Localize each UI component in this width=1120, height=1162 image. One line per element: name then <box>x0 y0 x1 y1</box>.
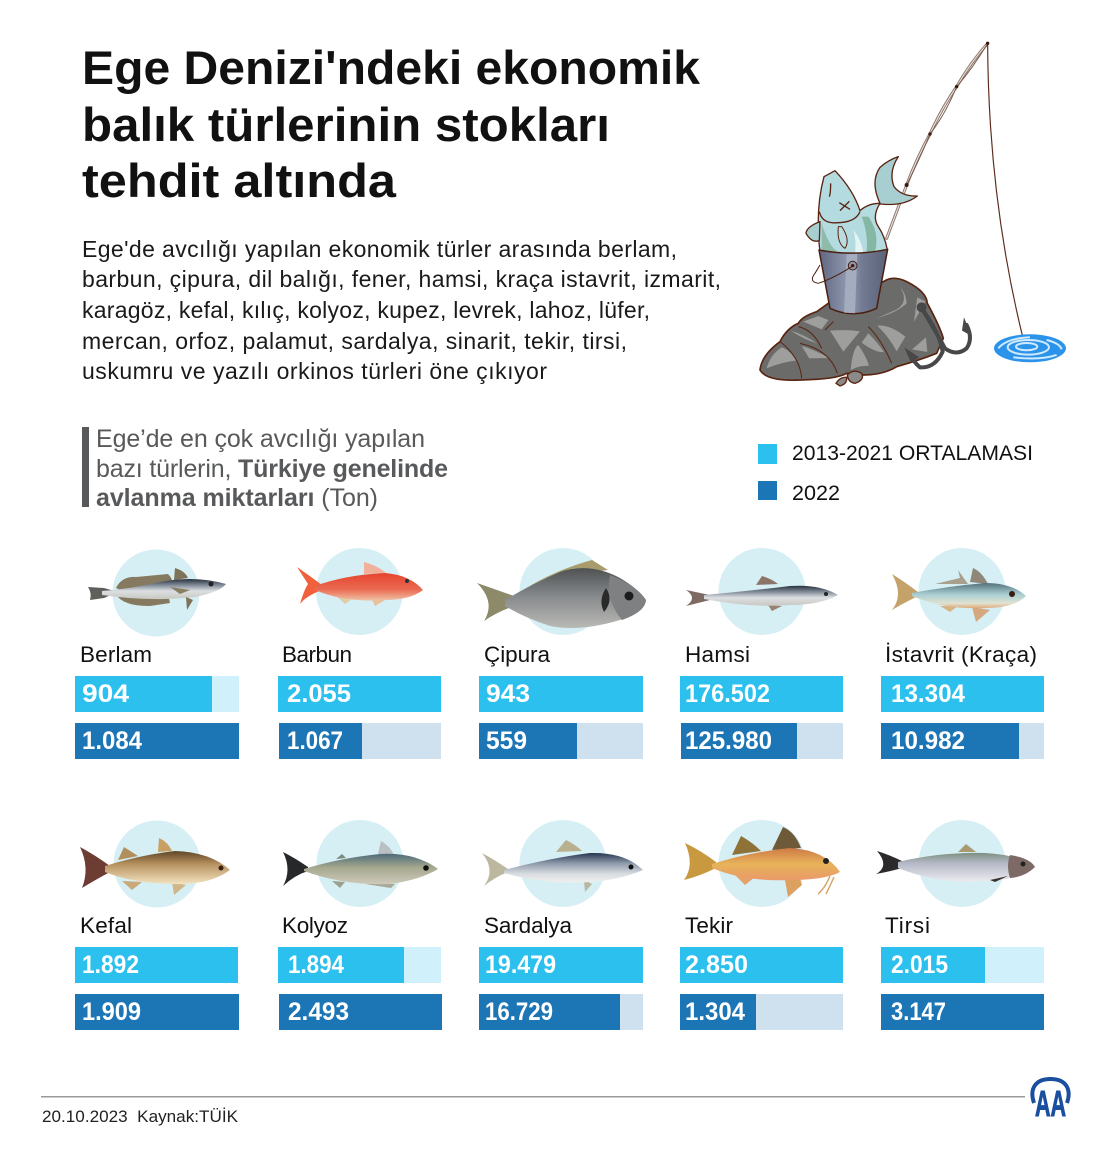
panel: Tirsi <box>876 820 1044 1030</box>
bar: 2022 <box>681 723 843 759</box>
icon: bucket <box>812 249 888 314</box>
bar: 2013-2021 average: 1.892 <box>82 951 139 979</box>
icon: water ripple <box>994 334 1066 362</box>
bar: 2013-2021 average: 2.055 <box>287 680 351 708</box>
bar: 2022: 1.304 <box>685 998 745 1026</box>
bar: 2022: 10.982 <box>891 727 965 755</box>
icon: rocks <box>760 278 943 386</box>
bar: 2013-2021 average <box>881 947 1044 983</box>
panel: Sardalya <box>479 820 643 1030</box>
bar: 2013-2021 average: 2.850 <box>685 951 748 979</box>
label: Barbun <box>282 642 352 667</box>
section subheading: avlanma miktarları (Ton) <box>96 484 378 512</box>
intro text block: uskumru ve yazılı orkinos türleri öne çıkıyor <box>82 358 547 384</box>
legend: 2022 <box>792 482 840 505</box>
bar: 2022: 3.147 <box>891 998 946 1026</box>
bar: 2022: 559 <box>486 727 527 755</box>
logo: AA <box>1032 1079 1069 1124</box>
panel: Berlam <box>75 550 239 759</box>
bar: 2013-2021 average <box>278 676 441 712</box>
footer: date and source: 20.10.2023 Kaynak:TÜİK <box>42 1107 238 1126</box>
section subheading <box>82 425 448 512</box>
icon: kolyoz fish <box>283 820 438 907</box>
label: Sardalya <box>484 913 572 938</box>
panel: Çipura <box>477 548 646 759</box>
section subheading: bazı türlerin, Türkiye genelinde <box>96 455 448 483</box>
panel: Hamsi <box>680 548 843 759</box>
intro text block: karagöz, kefal, kılıç, kolyoz, kupez, levrek, lahoz, lüfer, <box>82 297 650 323</box>
bar: 2022 <box>479 723 643 759</box>
icon: kefal fish <box>80 820 230 908</box>
icon: hamsi fish <box>686 548 838 635</box>
bar: 2022: 2.493 <box>288 998 349 1026</box>
title: tehdit altında <box>82 154 397 207</box>
intro text block <box>82 236 721 384</box>
icon: istavrit fish <box>892 548 1026 635</box>
bar: 2013-2021 average: 2.015 <box>891 951 948 979</box>
title <box>82 41 701 207</box>
icon: hook <box>904 302 972 367</box>
bar: 2022 <box>279 994 442 1030</box>
intro text block: mercan, orfoz, palamut, sardalya, sinarit, tekir, tirsi, <box>82 328 627 354</box>
bar: 2022: 16.729 <box>485 998 553 1026</box>
bar: 2013-2021 average <box>680 676 843 712</box>
bar: 2013-2021 average <box>881 676 1044 712</box>
intro text block: Ege'de avcılığı yapılan ekonomik türler arasında berlam, <box>82 236 677 262</box>
label: Berlam <box>80 642 152 667</box>
panel: Kolyoz <box>278 820 442 1030</box>
bar: 2013-2021 average <box>75 676 239 712</box>
bar: 2013-2021 average: 904 <box>82 680 129 708</box>
icon: tirsi fish <box>876 820 1035 907</box>
bar: 2013-2021 average <box>680 947 843 983</box>
bar: 2013-2021 average <box>278 947 441 983</box>
bar: 2013-2021 average: 13.304 <box>891 680 965 708</box>
bar: 2022: 1.067 <box>287 727 343 755</box>
title: Ege Denizi'ndeki ekonomik <box>82 41 701 94</box>
icon: barbun fish <box>297 548 423 635</box>
label: Tekir <box>685 913 734 938</box>
bar: 2013-2021 average <box>479 676 643 712</box>
bar: 2013-2021 average: 19.479 <box>485 951 556 979</box>
label: Kolyoz <box>282 913 348 938</box>
bar: 2022: 1.084 <box>82 727 142 755</box>
section subheading: Ege’de en çok avcılığı yapılan <box>96 425 425 453</box>
bar: 2022 <box>479 994 643 1030</box>
icon: fishing rod and line <box>887 42 1023 337</box>
label: Kefal <box>80 913 132 938</box>
legend <box>758 442 1033 505</box>
bar: 2022 <box>75 994 239 1030</box>
bar: 2013-2021 average: 943 <box>486 680 530 708</box>
bar: 2022: 1.909 <box>82 998 141 1026</box>
panel: Tekir <box>680 820 843 1030</box>
intro text block: barbun, çipura, dil balığı, fener, hamsi, kraça istavrit, izmarit, <box>82 266 721 292</box>
icon: dead fish <box>806 157 917 254</box>
illustration: fishing rod, fish in bucket on rocks <box>760 42 1066 386</box>
icon: sardalya fish <box>482 820 643 907</box>
bar: 2013-2021 average <box>75 947 238 983</box>
bar: 2013-2021 average <box>479 947 643 983</box>
title: balık türlerinin stokları <box>82 98 610 151</box>
label: Çipura <box>484 642 550 667</box>
bar: 2013-2021 average: 176.502 <box>685 680 770 708</box>
bar: 2022 <box>881 723 1044 759</box>
bar: 2022 <box>680 994 843 1030</box>
legend: 2013-2021 ORTALAMASI <box>792 442 1033 465</box>
label: Hamsi <box>685 642 750 667</box>
panel: Kefal <box>75 820 239 1030</box>
logo: AA: AA <box>1035 1083 1066 1124</box>
label: Tirsi <box>885 913 930 938</box>
bar: 2022 <box>881 994 1044 1030</box>
bar: 2022 <box>279 723 441 759</box>
bar: 2022 <box>75 723 239 759</box>
icon: tekir fish <box>684 820 840 907</box>
panel: Barbun <box>278 548 441 759</box>
bar: 2022: 125.980 <box>685 727 772 755</box>
icon: çipura fish <box>477 548 646 635</box>
bar: 2013-2021 average: 1.894 <box>288 951 344 979</box>
icon: berlam fish <box>88 550 226 636</box>
label: İstavrit (Kraça) <box>885 642 1037 667</box>
panel: İstavrit (Kraça) <box>881 548 1044 759</box>
